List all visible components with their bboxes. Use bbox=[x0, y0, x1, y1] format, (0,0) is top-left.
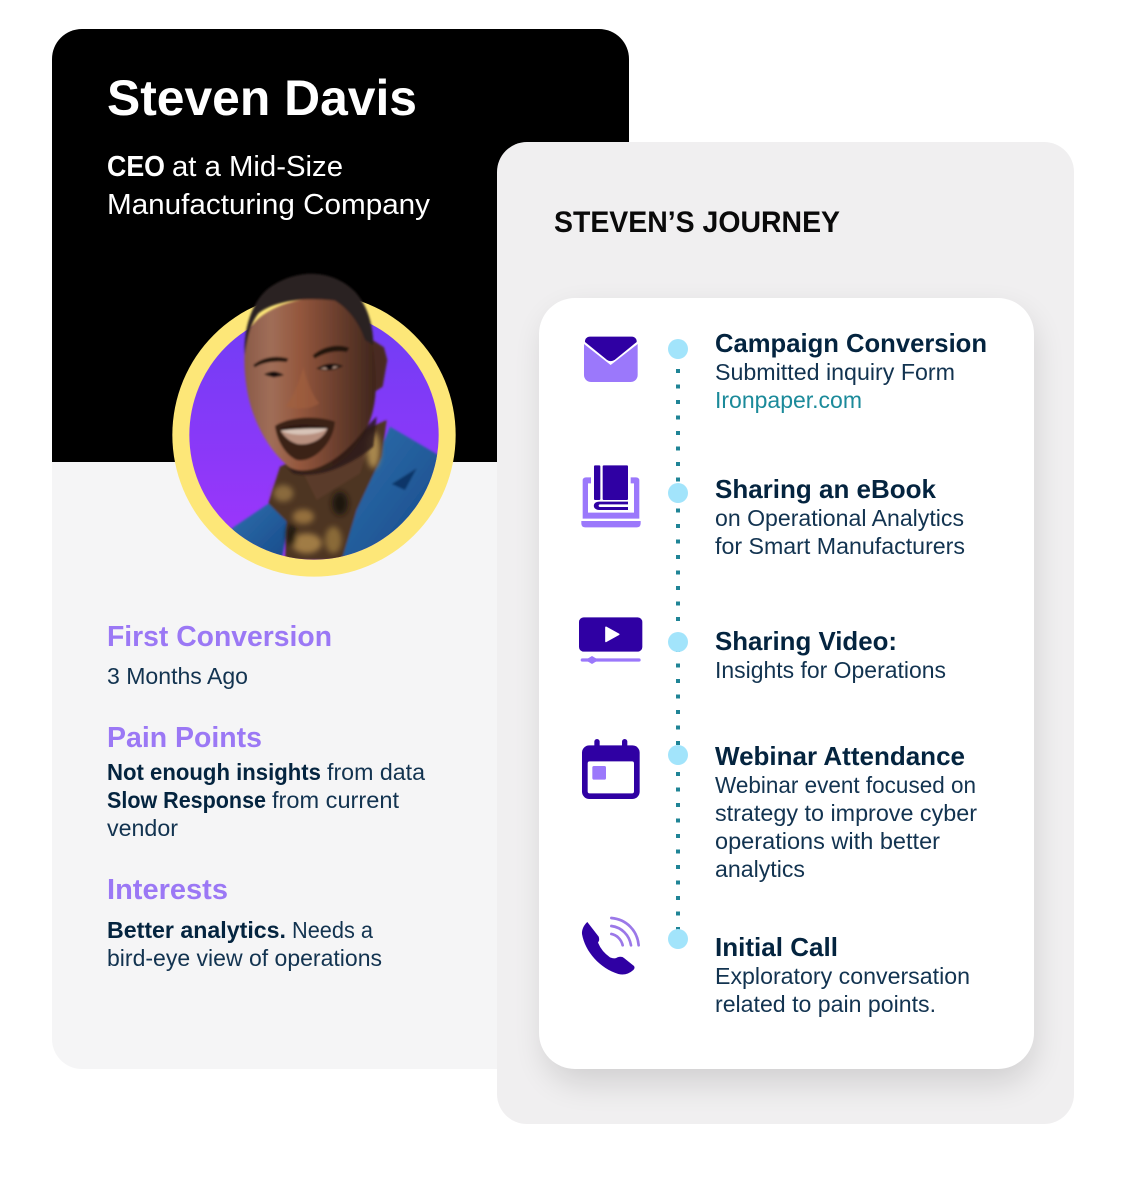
pain points: vendor bbox=[107, 815, 178, 841]
first conversion bbox=[107, 621, 332, 689]
panel: journey bbox=[497, 142, 1074, 1124]
step: initial call: related to pain points. bbox=[715, 991, 936, 1017]
pain points: Slow Response bbox=[107, 787, 266, 813]
role text: Manufacturing Company bbox=[107, 189, 430, 221]
first conversion: 3 Months Ago bbox=[107, 663, 248, 689]
step: webinar attendance bbox=[715, 741, 977, 882]
step: campaign conversion bbox=[715, 328, 987, 413]
timeline node 4 bbox=[668, 745, 688, 765]
step: campaign conversion: Campaign Conversion bbox=[715, 328, 987, 358]
timeline node 5 bbox=[668, 929, 688, 949]
role text: CEO bbox=[107, 151, 165, 183]
interests bbox=[107, 874, 382, 971]
step: campaign conversion: Submitted inquiry Form bbox=[715, 359, 955, 385]
interests: Needs a bbox=[292, 917, 373, 943]
step: sharing an ebook: for Smart Manufacturers bbox=[715, 533, 965, 559]
interests: Interests bbox=[107, 874, 228, 906]
step: webinar attendance: analytics bbox=[715, 856, 805, 882]
pain points: Pain Points bbox=[107, 722, 262, 754]
step: webinar attendance: strategy to improve cyber bbox=[715, 800, 977, 826]
timeline node 2 bbox=[668, 483, 688, 503]
icon: phone bbox=[582, 918, 639, 974]
interests: bird-eye view of operations bbox=[107, 945, 382, 971]
step: sharing an ebook: Sharing an eBook bbox=[715, 474, 937, 504]
panel: timeline card bbox=[539, 298, 1034, 1069]
step: webinar attendance: Webinar Attendance bbox=[715, 741, 965, 771]
role text: at a Mid-Size bbox=[172, 151, 343, 183]
step: sharing video bbox=[715, 626, 946, 683]
pain points bbox=[107, 722, 425, 841]
pain points: from current bbox=[272, 787, 400, 813]
step: webinar attendance: Webinar event focused on bbox=[715, 772, 976, 798]
interests: Better analytics. bbox=[107, 917, 286, 943]
pain points: from data bbox=[327, 759, 425, 785]
step: sharing an ebook bbox=[715, 474, 965, 559]
role text bbox=[107, 151, 430, 221]
timeline node 3 bbox=[668, 632, 688, 652]
journey heading: STEVEN’S JOURNEY bbox=[554, 206, 840, 239]
pain points: Not enough insights bbox=[107, 759, 321, 785]
panel: profile card bbox=[52, 29, 629, 1069]
step: sharing video: Insights for Operations bbox=[715, 657, 946, 683]
step: initial call: Exploratory conversation bbox=[715, 963, 970, 989]
step: sharing video: Sharing Video: bbox=[715, 626, 897, 656]
icon: ebook bbox=[581, 465, 641, 527]
name heading: Steven Davis bbox=[107, 70, 417, 126]
timeline node 1 bbox=[668, 339, 688, 359]
step: campaign conversion: Ironpaper.com bbox=[715, 387, 862, 413]
first conversion: First Conversion bbox=[107, 621, 332, 653]
icon: video bbox=[579, 617, 642, 664]
icon: calendar bbox=[582, 739, 640, 799]
portrait bbox=[172, 274, 456, 577]
icon: envelope bbox=[584, 337, 638, 382]
step: webinar attendance: operations with better bbox=[715, 828, 940, 854]
step: sharing an ebook: on Operational Analytics bbox=[715, 505, 964, 531]
step: initial call bbox=[715, 932, 970, 1017]
step: initial call: Initial Call bbox=[715, 932, 838, 962]
